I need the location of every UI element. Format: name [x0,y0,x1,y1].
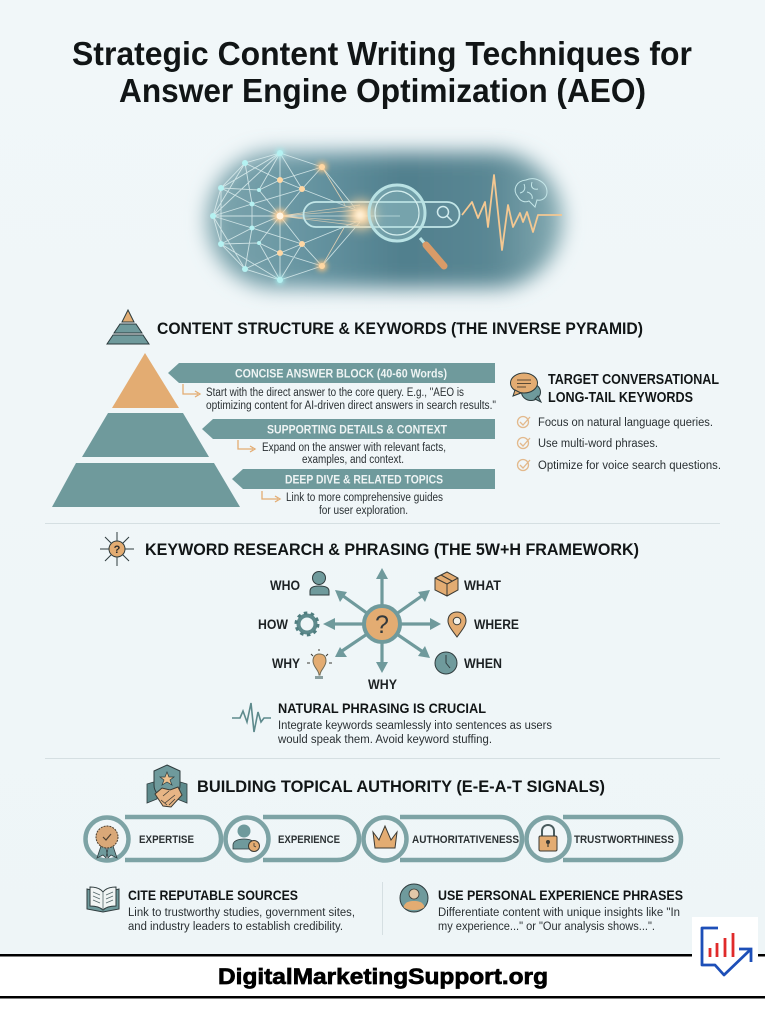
diagram: 5W+H arrows [323,568,441,673]
label: where [448,612,519,637]
heading: long-tail keywords [548,372,719,406]
label: how: HOW [258,617,288,632]
text: supporting details description: Expand on the answer with relevant facts, [262,442,446,454]
banner: supporting details: SUPPORTING DETAILS & CONTEXT [267,422,448,436]
icon: open book [87,887,119,912]
label: what [435,572,502,596]
icon: chat bubbles [510,373,541,402]
banner: concise answer block [168,363,495,383]
callout: natural phrasing: Integrate keywords seamlessly into sentences as users [278,720,552,732]
panel: personal experience phrases: Differentiate content with unique insights like "In [438,907,680,919]
section heading: keyword research [100,532,639,566]
panel: authoritativeness [364,817,522,860]
label: why with bulb: WHY [272,656,300,671]
text: concise answer description: optimizing content for AI-driven direct answers in search results." [206,400,496,412]
text: supporting details description: examples, and context. [302,454,404,466]
banner: deep dive [232,469,495,489]
label: who: WHO [270,578,300,593]
section heading: topical authority: BUILDING TOPICAL AUTHORITY (E-E-A-T SIGNALS) [197,777,605,796]
section heading: content structure: CONTENT STRUCTURE & KEYWORDS (THE INVERSE PYRAMID) [157,319,643,338]
footer [0,954,765,1024]
title [72,35,692,109]
label: when: WHEN [464,656,502,671]
panel: cite reputable sources: Link to trustworthy studies, government sites, [128,907,355,919]
panel: personal experience phrases: my experience..." or "Our analysis shows...". [438,921,655,933]
callout: natural phrasing: would speak them. Avoid keyword stuffing. [277,734,492,746]
text: deep dive description: Link to more comprehensive guides [286,492,443,504]
chart: inverse pyramid [52,353,240,507]
icon: shield and handshake [147,765,187,807]
panel: cite reputable sources [87,887,355,933]
panel: trustworthiness [526,817,681,860]
panel: experience: EXPERIENCE [278,834,340,846]
section heading: topical authority [147,765,605,807]
hero illustration: neural network, search bar, magnifier, pulse and brain [207,149,563,288]
logo: chart bubble [692,917,758,977]
icon: question hub: ? [114,544,121,556]
panel: expertise: EXPERTISE [139,834,194,846]
panel: personal experience phrases [400,884,683,933]
list: long-tail tips [518,416,721,472]
label: why bottom: WHY [368,677,397,692]
callout: natural phrasing [232,700,552,746]
text: supporting details description [238,440,446,466]
label: what: WHAT [464,578,502,593]
icon: voice wave [232,703,271,732]
list: long-tail tips: Optimize for voice search questions. [538,460,721,472]
text: concise answer description: Start with the direct answer to the core query. E.g., "AEO is [206,387,464,399]
section heading: content structure [107,310,643,344]
icon: question hub [100,532,134,566]
label: who [270,572,329,595]
label: why with bulb [272,649,332,679]
icon: person avatar [400,884,428,912]
label: when [435,652,502,674]
diagram: 5W+H arrows: ? [375,611,389,639]
section heading: keyword research: KEYWORD RESEARCH & PHRASING (THE 5W+H FRAMEWORK) [145,540,639,559]
panel: personal experience phrases: USE PERSONAL EXPERIENCE PHRASES [438,887,683,903]
list: long-tail tips: Use multi-word phrases. [538,438,658,450]
title: Answer Engine Optimization (AEO) [119,72,646,109]
label: how [258,613,318,635]
text: concise answer description [183,384,496,412]
panel: experience [226,817,359,860]
heading: long-tail keywords: TARGET CONVERSATIONAL [548,372,719,388]
text: deep dive description [262,491,443,517]
panel: cite reputable sources: and industry leaders to establish credibility. [128,921,343,933]
panel: trustworthiness: TRUSTWORTHINESS [574,834,674,846]
callout: natural phrasing: NATURAL PHRASING IS CRUCIAL [278,700,486,716]
heading: long-tail keywords: LONG-TAIL KEYWORDS [548,390,693,406]
panel: expertise [86,817,221,860]
banner: concise answer block: CONCISE ANSWER BLOCK (40-60 Words) [235,366,447,380]
label: where: WHERE [474,617,519,632]
icon: small pyramid [107,310,149,344]
panel: authoritativeness: AUTHORITATIVENESS [412,834,519,846]
title: Strategic Content Writing Techniques for [72,35,692,72]
text: deep dive description: for user exploration. [319,505,408,517]
panel: cite reputable sources: CITE REPUTABLE SOURCES [128,887,298,903]
banner: deep dive: DEEP DIVE & RELATED TOPICS [285,472,443,486]
list: long-tail tips: Focus on natural language queries. [538,417,713,429]
banner: supporting details [202,419,495,439]
panel: long-tail keywords [510,372,721,472]
footer: DigitalMarketingSupport.org [218,964,548,989]
